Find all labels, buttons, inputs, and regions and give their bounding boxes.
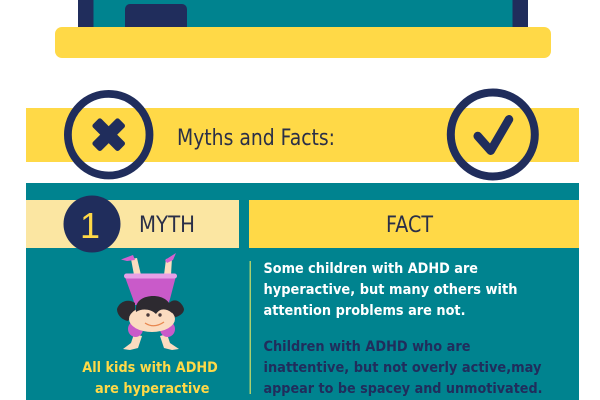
top device illustration [55, 0, 551, 58]
arms [123, 334, 142, 350]
heading band: myths and facts [26, 108, 579, 162]
fact text: second paragraph: appear to be spacey and unmotivated. [264, 381, 542, 397]
myth header: MYTH [139, 213, 195, 238]
myth statement: All kids with ADHD [82, 360, 218, 376]
fact text: second paragraph [264, 339, 542, 397]
fact text: first paragraph: Some children with ADHD are [264, 261, 478, 277]
fact header: FACT [386, 213, 433, 238]
face [129, 306, 175, 332]
fact text: first paragraph: attention problems are not. [264, 303, 466, 319]
hair [136, 296, 172, 314]
number badge: 1 [80, 205, 100, 246]
dress [125, 276, 176, 305]
legs [131, 258, 141, 275]
shoes [121, 255, 135, 261]
fact text: first paragraph: hyperactive, but many others with [264, 282, 518, 298]
number badge [64, 196, 120, 252]
myth statement [82, 360, 218, 397]
fact text: second paragraph: Children with ADHD who are [264, 339, 471, 355]
icon: cross in circle [68, 94, 150, 176]
panel: myth 1 [26, 183, 579, 400]
eyes [146, 313, 150, 317]
fact text: second paragraph: inattentive, but not overly active,may [264, 360, 542, 376]
mouth [145, 322, 164, 326]
sleeves [128, 321, 143, 337]
heading text: Myths and Facts: [177, 126, 335, 151]
myth statement: are hyperactive [95, 381, 210, 397]
pigtails [117, 301, 135, 321]
divider line [250, 261, 251, 394]
icon: check mark in circle [451, 92, 535, 176]
fact text: first paragraph [264, 261, 518, 319]
myth header [26, 200, 239, 248]
fact header [249, 200, 579, 248]
illustration: girl doing a handstand [117, 253, 184, 350]
